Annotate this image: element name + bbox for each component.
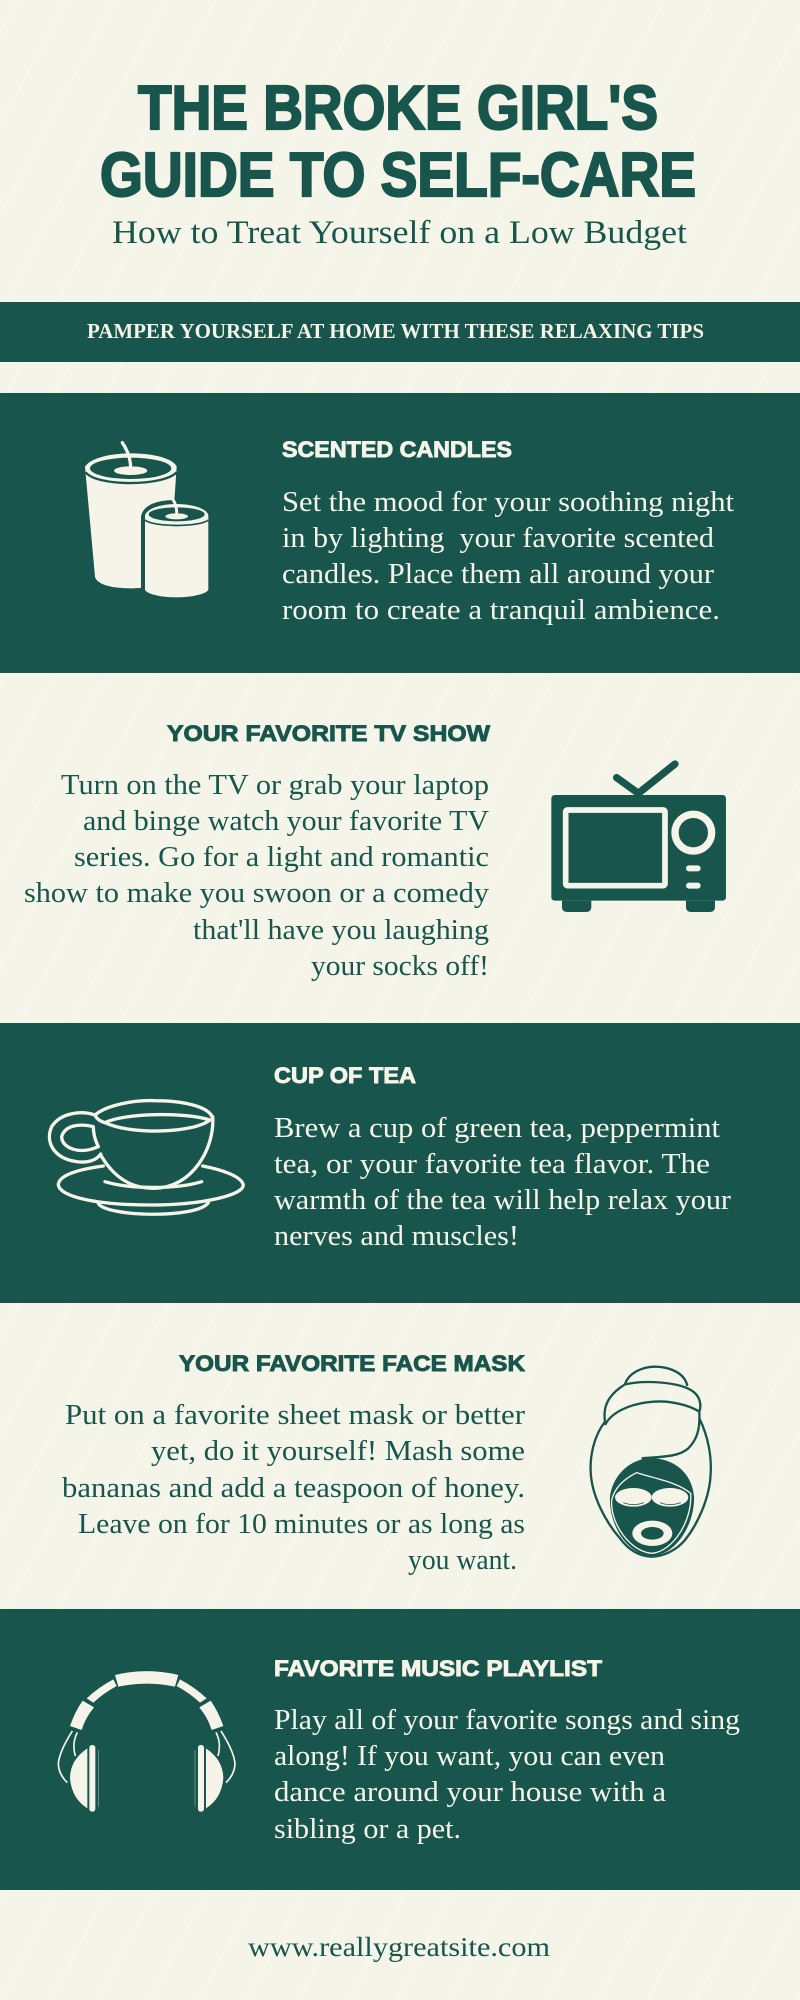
text block — [282, 486, 734, 626]
text block: nerves and muscles! — [274, 1220, 519, 1252]
title: GUIDE TO SELF-CARE — [100, 141, 696, 210]
panel: tv show — [24, 721, 726, 982]
heading: FAVORITE MUSIC PLAYLIST — [274, 1656, 603, 1681]
text block: and binge watch your favorite TV — [83, 805, 489, 837]
text block: tea, or your favorite tea flavor. The — [274, 1148, 710, 1180]
text block — [62, 1399, 525, 1576]
text block: series. Go for a light and romantic — [74, 841, 489, 873]
heading: CUP OF TEA — [274, 1063, 416, 1088]
text block: that'll have you laughing — [193, 914, 489, 946]
icon: headphones — [58, 1671, 235, 1812]
text block: show to make you swoon or a comedy — [24, 877, 490, 909]
text block: warmth of the tea will help relax your — [274, 1184, 731, 1216]
banner — [0, 302, 800, 362]
text block: your socks off! — [311, 950, 489, 982]
text block: in by lighting your favorite scented — [282, 522, 715, 554]
icon: television — [551, 764, 726, 912]
text block: sibling or a pet. — [274, 1813, 461, 1845]
icon: woman with face mask — [591, 1367, 711, 1557]
heading: YOUR FAVORITE FACE MASK — [179, 1351, 525, 1376]
icon: teacup — [49, 1101, 243, 1214]
text block: Set the mood for your soothing night — [282, 486, 734, 518]
text block: yet, do it yourself! Mash some — [151, 1435, 525, 1467]
text block: along! If you want, you can even — [274, 1740, 666, 1772]
subtitle: How to Treat Yourself on a Low Budget — [112, 215, 687, 251]
icon: candles — [85, 443, 213, 600]
heading: SCENTED CANDLES — [282, 437, 512, 462]
panel: cup of tea — [0, 1023, 800, 1303]
text block — [24, 769, 490, 982]
panel: face mask — [62, 1351, 711, 1576]
text block: Turn on the TV or grab your laptop — [61, 769, 489, 801]
banner: PAMPER YOURSELF AT HOME WITH THESE RELAXING TIPS — [87, 319, 704, 343]
text block: Play all of your favorite songs and sing — [274, 1704, 740, 1736]
heading: YOUR FAVORITE TV SHOW — [167, 721, 490, 746]
text block: you want. — [408, 1544, 517, 1576]
text block: room to create a tranquil ambience. — [282, 594, 720, 626]
text block — [274, 1704, 740, 1845]
text block: dance around your house with a — [274, 1776, 666, 1808]
title: THE BROKE GIRL'S — [138, 74, 658, 143]
text block: candles. Place them all around your — [282, 558, 714, 590]
text block — [274, 1112, 731, 1252]
text block: Brew a cup of green tea, peppermint — [274, 1112, 720, 1144]
footer url: www.reallygreatsite.com — [248, 1932, 550, 1962]
text block: Put on a favorite sheet mask or better — [65, 1399, 525, 1431]
text block: bananas and add a teaspoon of honey. — [62, 1472, 525, 1504]
text block: Leave on for 10 minutes or as long as — [78, 1508, 525, 1540]
title — [100, 74, 696, 210]
panel: scented candles — [0, 393, 800, 673]
panel: music playlist — [0, 1609, 800, 1890]
